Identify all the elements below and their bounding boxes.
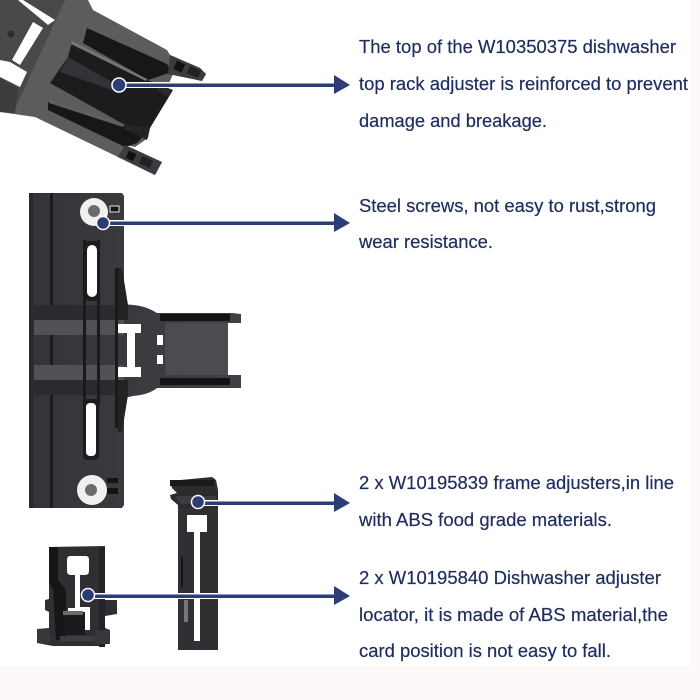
product photo: assembled adjuster — [29, 193, 241, 508]
text block: adjuster locator: card position is not easy to fall. — [359, 641, 611, 661]
product photo: adjuster locator — [37, 546, 117, 647]
text block: frame adjusters: 2 x W10195839 frame adjusters,in line — [359, 473, 674, 493]
text block: top reinforcement: The top of the W10350375 dishwasher — [359, 37, 676, 57]
text block: adjuster locator: locator, it is made of ABS material,the — [359, 605, 668, 625]
text block: top reinforcement: damage and breakage. — [359, 111, 547, 131]
arrow: frame adjuster callout — [192, 493, 350, 512]
text block: frame adjusters: with ABS food grade materials. — [358, 510, 612, 530]
text block: top reinforcement — [359, 37, 688, 131]
arrow: steel screw callout — [96, 213, 350, 232]
product photo: frame adjuster — [170, 477, 218, 650]
text block: steel screws: wear resistance. — [358, 232, 493, 252]
text block: steel screws: Steel screws, not easy to rust,strong — [359, 196, 656, 216]
product photo: top rack adjuster top end — [0, 0, 206, 175]
text block: adjuster locator: 2 x W10195840 Dishwasher adjuster — [359, 568, 661, 588]
text block: steel screws — [358, 196, 656, 252]
text block: frame adjusters — [358, 473, 674, 530]
text block: top reinforcement: top rack adjuster is reinforced to prevent — [359, 74, 688, 94]
text block: adjuster locator — [359, 568, 668, 661]
arrow: top rack callout — [112, 75, 350, 94]
arrow: adjuster locator callout — [82, 586, 350, 605]
